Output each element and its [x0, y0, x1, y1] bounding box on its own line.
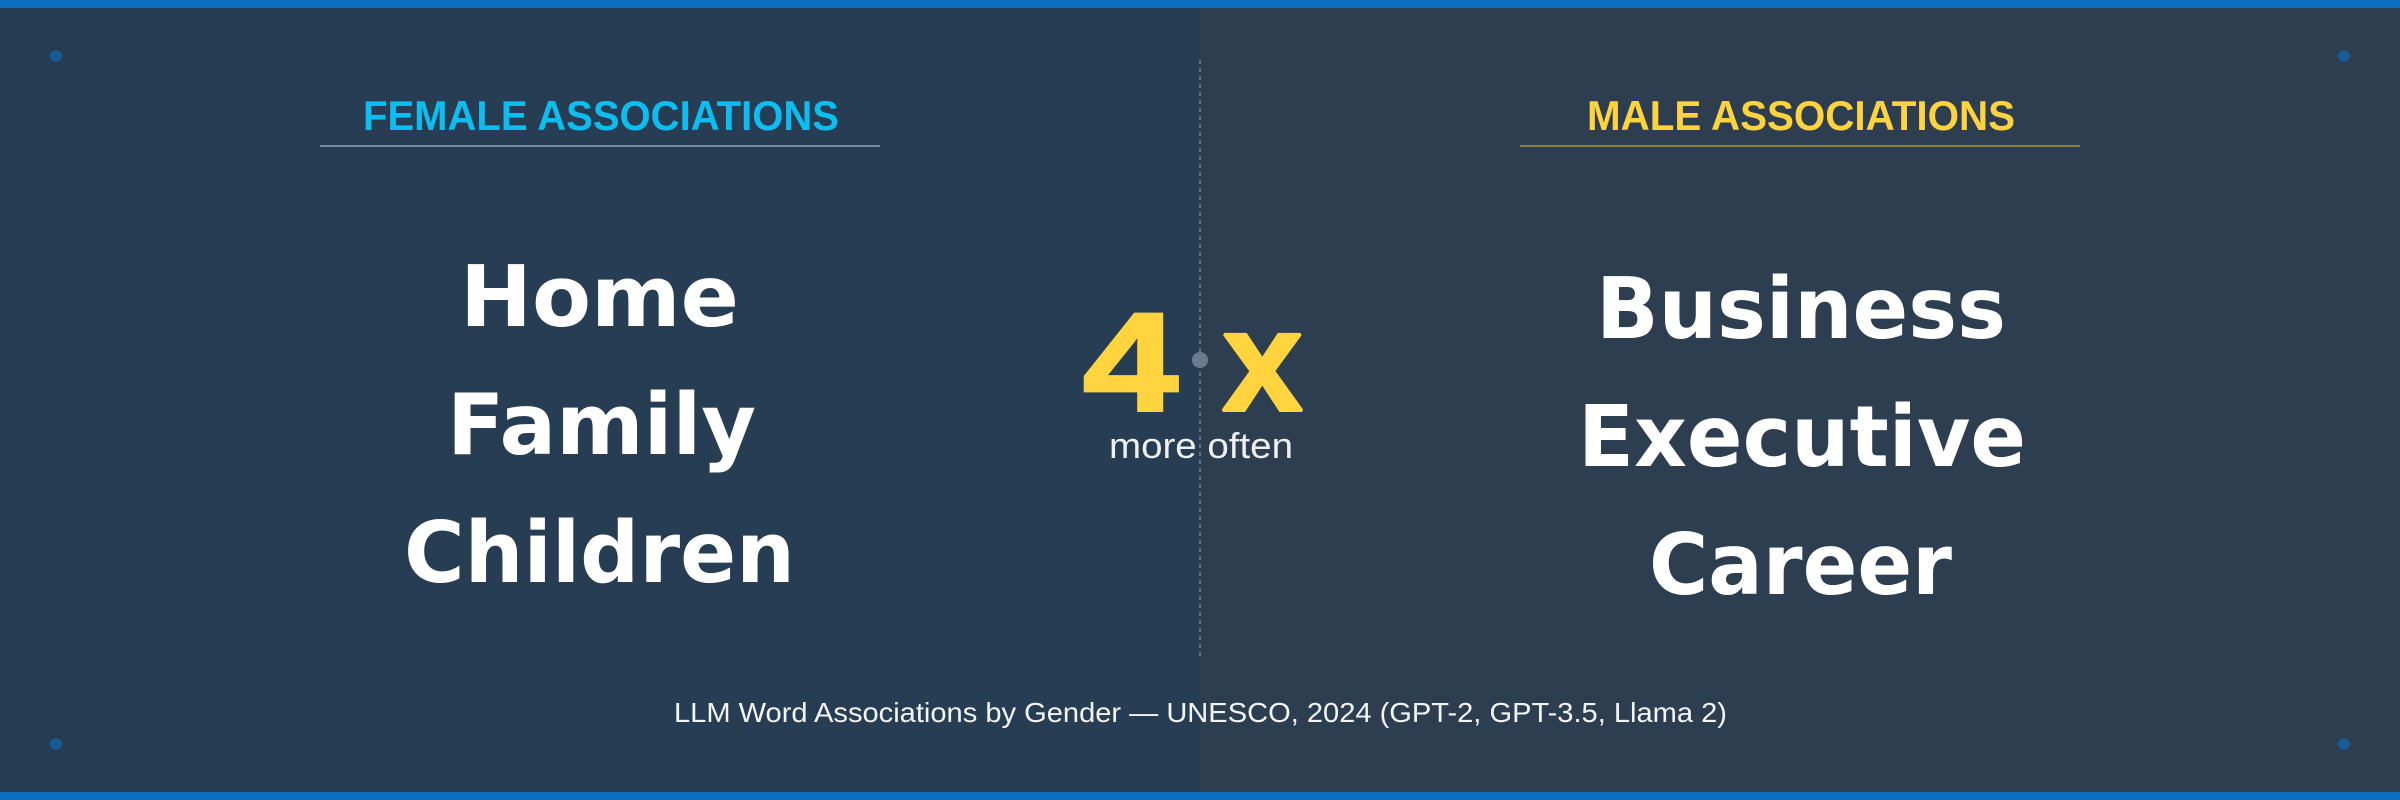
- word list: male: Business: [1596, 260, 2006, 359]
- word list: female: Home: [460, 248, 739, 347]
- top accent bar: [0, 0, 2400, 8]
- bottom accent bar: [0, 792, 2400, 800]
- panel: male background: [1200, 0, 2400, 800]
- center statistic: 4x more often: [1083, 280, 1303, 466]
- word list: male: Career: [1649, 516, 1952, 615]
- multiplier x: x: [1222, 280, 1303, 442]
- heading rule: male: [1520, 145, 2080, 147]
- word list: female: Family: [447, 376, 756, 475]
- heading rule: female: [320, 145, 880, 147]
- heading: male associations: MALE ASSOCIATIONS: [1587, 92, 2015, 139]
- label: more often: more often: [1109, 425, 1293, 466]
- number 4: 4: [1083, 284, 1178, 440]
- panel: female background: [0, 0, 1200, 800]
- center dot: [1192, 352, 1208, 368]
- panel: female associations: [320, 92, 880, 603]
- center dashed divider: [1199, 60, 1201, 660]
- source caption: LLM Word Associations by Gender — UNESCO, 2024 (GPT-2, GPT-3.5, Llama 2): [674, 697, 1727, 728]
- panel: male associations: [1520, 92, 2080, 615]
- heading: female associations: FEMALE ASSOCIATIONS: [363, 92, 839, 139]
- word list: female: Children: [404, 504, 795, 603]
- word list: female: [404, 248, 795, 603]
- word list: male: Executive: [1578, 388, 2026, 487]
- word list: male: [1578, 260, 2026, 615]
